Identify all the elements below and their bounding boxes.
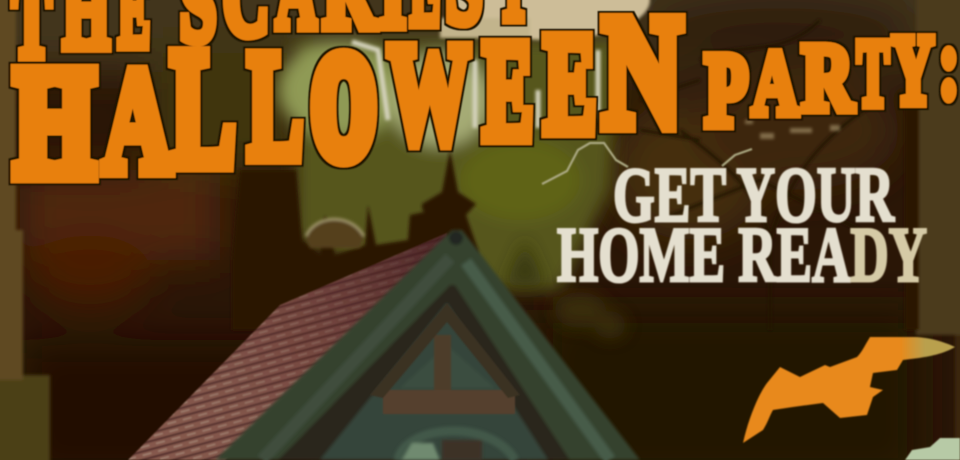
title line 2: HALLOWEEN: E — [483, 12, 533, 169]
title — [12, 0, 959, 208]
pale branch highlights — [745, 120, 840, 139]
title line 2: HALLOWEEN: O — [313, 28, 374, 185]
cloud edges behind title — [352, 42, 598, 128]
title line 1: THE SCARIEST — [12, 0, 530, 81]
title line 2: HALLOWEEN: E — [544, 5, 596, 162]
title line 2: HALLOWEEN: H — [15, 38, 94, 208]
title line 2: PARTY colon — [705, 8, 959, 149]
bat — [743, 337, 955, 443]
foreground pine trees — [505, 240, 626, 339]
title line 2: PARTY colon: A — [752, 32, 798, 134]
title line 2: HALLOWEEN: W — [388, 16, 470, 173]
title line 2: PARTY colon: Y — [892, 15, 934, 125]
lightning bolts — [542, 143, 752, 184]
title line 2: PARTY colon: R — [802, 26, 854, 132]
house roof: shingled left slope — [128, 233, 447, 460]
foreground house — [128, 230, 640, 460]
right border strip — [905, 0, 960, 460]
title line 2: PARTY colon: : — [939, 8, 959, 119]
title line 2: HALLOWEEN: A — [103, 39, 172, 204]
house lower arch and window — [398, 431, 515, 460]
sky glow — [278, 40, 620, 290]
title line 2: HALLOWEEN: L — [171, 17, 235, 201]
house gable: timber beams — [370, 303, 520, 414]
pale cloud near mansion — [306, 219, 364, 248]
distant haunted mansion silhouette — [232, 150, 478, 330]
left border strip — [0, 0, 50, 460]
pale cloud in bottom-right corner — [905, 438, 960, 460]
title line 2: PARTY colon: T — [857, 22, 889, 126]
tree branch silhouettes — [640, 20, 880, 330]
title line 2: PARTY colon: P — [705, 32, 748, 149]
moon glow — [440, 0, 650, 40]
title line 2: HALLOWEEN — [15, 0, 682, 208]
house gable: green fascia boards — [215, 230, 640, 460]
title line 2: HALLOWEEN: L — [248, 20, 303, 191]
subtitle: GET YOUR HOME READY — [557, 151, 927, 298]
